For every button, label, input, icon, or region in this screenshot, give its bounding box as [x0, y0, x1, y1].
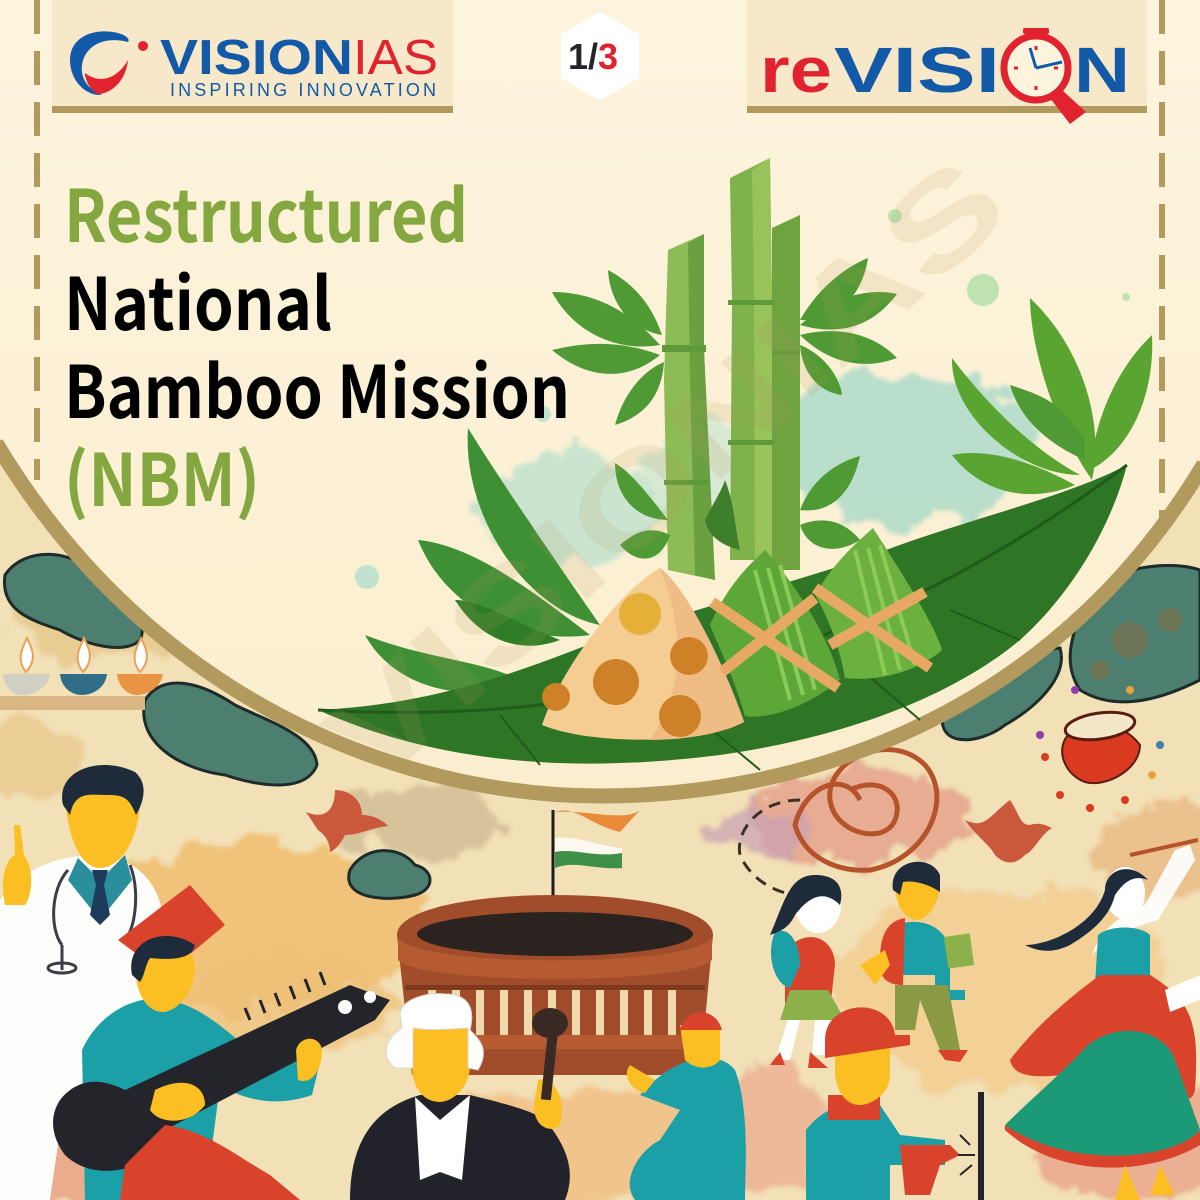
left logo panel: INSPIRING INNOVATION [170, 80, 436, 100]
top cream panel with gold curved border [0, 0, 1200, 798]
title: (NBM) [64, 422, 260, 527]
figure: school girl [770, 875, 845, 1068]
figure: seated potter [627, 1012, 746, 1200]
right reVISION logo panel [747, 0, 1147, 124]
left logo panel [52, 0, 453, 113]
right reVISION logo panel: N [1074, 34, 1130, 106]
right reVISION logo panel: re [760, 34, 832, 106]
title [64, 158, 570, 527]
page number badge [561, 12, 639, 100]
right reVISION logo panel: VISI [834, 34, 1000, 106]
title: Restructured [64, 158, 468, 263]
left logo panel: IAS [353, 31, 438, 85]
title: National [64, 246, 332, 351]
page number badge: 1/3 [568, 36, 618, 77]
dashed gold side lines [37, 0, 1162, 520]
title: Bamboo Mission [64, 334, 570, 439]
figure: judge [350, 994, 570, 1200]
clouds and lamps left [0, 554, 430, 898]
watercolor wash behind bamboo [355, 209, 1130, 589]
illustration: bamboo stalks [662, 158, 800, 580]
icon: red pot [1036, 686, 1164, 812]
figure: worker with drill [806, 1007, 984, 1200]
figure: doctor [0, 765, 165, 1200]
watermark: VISIONIAS [300, 131, 1032, 810]
illustration: bamboo leaves [365, 258, 1152, 692]
illustration: large dark leaf [318, 465, 1127, 770]
spirals and birds [306, 750, 1052, 896]
building: parliament with flag [397, 810, 713, 1075]
illustration: rice dumplings [542, 528, 942, 740]
figure: school boy [860, 862, 974, 1062]
left logo panel: VISION [160, 31, 353, 85]
clouds and pot right [942, 565, 1200, 812]
figure: sitar player [53, 885, 390, 1200]
icon: oil lamps [0, 638, 163, 710]
figure: dancer [1005, 840, 1200, 1200]
icon: globe logo [70, 31, 148, 95]
icon: clock magnifier [1004, 28, 1086, 124]
